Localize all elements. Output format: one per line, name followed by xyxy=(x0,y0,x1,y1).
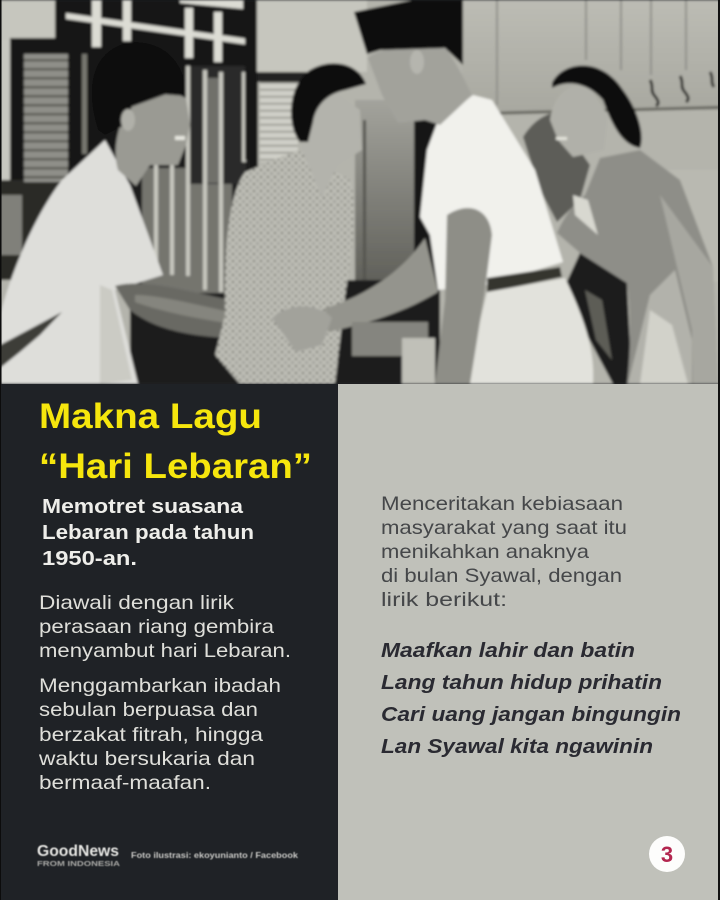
subtitle: 1950-an. xyxy=(42,548,137,570)
title: Makna Lagu xyxy=(39,397,262,436)
subtitle: Lebaran pada tahun xyxy=(42,522,254,544)
lyrics: Lang tahun hidup prihatin xyxy=(381,672,662,694)
man centre: head xyxy=(368,45,472,125)
woman centre: face and neck xyxy=(301,92,362,198)
text block: opening lyric: perasaan riang gembira xyxy=(39,616,274,638)
man centre: shirt xyxy=(420,95,563,290)
man centre: belt xyxy=(487,267,562,293)
man centre: forearm xyxy=(435,208,492,384)
text block: worship description: waktu bersukaria dan xyxy=(38,748,255,770)
window frame xyxy=(55,0,258,190)
window cross bars xyxy=(66,0,249,62)
photo credit: Foto ilustrasi: ekoyunianto / Facebook xyxy=(131,850,298,860)
photo: people shaking hands at Lebaran xyxy=(0,0,720,384)
left shutter xyxy=(24,54,68,182)
logo: GoodNews from Indonesia xyxy=(37,843,120,868)
man left: shirt xyxy=(0,140,163,384)
text block: opening lyric xyxy=(39,592,291,662)
subtitle xyxy=(42,496,254,570)
logo: GoodNews from Indonesia: GoodNews xyxy=(37,843,119,860)
man left: arm xyxy=(115,283,305,342)
text block: custom of Syawal weddings: lirik berikut: xyxy=(381,589,507,611)
lyrics: Maafkan lahir dan batin xyxy=(381,640,635,662)
text block: worship description: Menggambarkan ibadah xyxy=(39,675,281,697)
text block: custom of Syawal weddings: menikahkan anaknya xyxy=(381,541,589,563)
text block: custom of Syawal weddings: Menceritakan kebiasaan xyxy=(381,493,623,515)
handshake and centre man's far arm xyxy=(325,238,438,332)
woman right: hair xyxy=(552,66,642,148)
page number badge xyxy=(649,836,685,872)
centre door and dark gap xyxy=(355,100,415,285)
man centre: trousers xyxy=(465,278,593,384)
lyrics: Cari uang jangan bingungin xyxy=(381,704,681,726)
lyrics: Lan Syawal kita ngawinin xyxy=(381,736,653,758)
woman centre: hair xyxy=(291,63,366,142)
logo: GoodNews from Indonesia: FROM INDONESIA xyxy=(37,861,120,868)
left wall xyxy=(0,0,56,46)
right wall xyxy=(462,0,720,112)
woman right: body xyxy=(557,150,718,384)
text block: worship description: bermaaf-maafan. xyxy=(39,772,211,794)
subtitle: Memotret suasana xyxy=(42,496,244,518)
title xyxy=(39,397,312,486)
man centre: cap xyxy=(354,0,463,65)
text block: custom of Syawal weddings: di bulan Syawal, dengan xyxy=(381,565,622,587)
round mirror behind woman xyxy=(523,113,590,222)
text block: worship description xyxy=(38,675,281,794)
batik skirt dark xyxy=(563,253,632,384)
text block: custom of Syawal weddings xyxy=(381,493,627,611)
window bars xyxy=(82,54,87,154)
man left: neck and face xyxy=(116,92,190,186)
second shutter xyxy=(260,82,298,162)
text block: opening lyric: Diawali dengan lirik xyxy=(39,592,234,614)
panel: right grey xyxy=(338,384,718,900)
title: “Hari Lebaran” xyxy=(39,447,312,486)
text block: custom of Syawal weddings: masyarakat yang saat itu xyxy=(381,517,627,539)
text block: worship description: berzakat fitrah, hingga xyxy=(39,724,263,746)
text block: worship description: sebulan berpuasa dan xyxy=(39,699,258,721)
woman right: face xyxy=(550,86,608,157)
panel: left dark xyxy=(1,384,338,900)
man left: hair xyxy=(92,42,186,135)
page number badge: 3 xyxy=(661,842,673,867)
wall hooks xyxy=(650,72,714,106)
upper wall xyxy=(257,0,367,72)
lyrics xyxy=(381,640,681,758)
text block: opening lyric: menyambut hari Lebaran. xyxy=(39,640,291,662)
woman centre: dress xyxy=(215,150,354,384)
